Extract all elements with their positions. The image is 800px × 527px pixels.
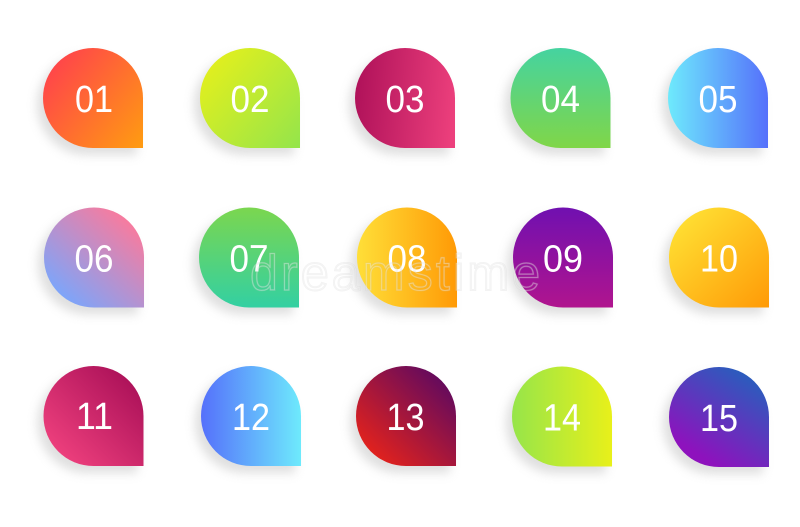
badge 11: [38, 366, 144, 473]
badge 08: [351, 208, 457, 314]
badge 10: [663, 208, 769, 314]
badge 05: [662, 48, 768, 155]
badge 12: [195, 366, 301, 473]
watermark: dreamstime: [250, 245, 540, 301]
badge 05: 05: [698, 79, 738, 121]
badge 02: 02: [230, 79, 270, 121]
badge 10: 10: [700, 238, 738, 280]
badge 15: [663, 367, 769, 474]
badge 07: [193, 208, 299, 314]
watermark: dreamstime: [250, 245, 540, 301]
badge 15: 15: [700, 398, 738, 440]
badge 13: 13: [386, 397, 424, 439]
badge 01: [37, 48, 143, 155]
badge 09: [507, 208, 613, 314]
badge 03: 03: [386, 79, 424, 121]
badge 04: [504, 48, 610, 155]
badge 13: [350, 366, 456, 473]
badge 09: 09: [543, 238, 583, 280]
badge 08: 08: [388, 238, 426, 280]
badge 03: [349, 48, 455, 155]
badge 04: 04: [541, 79, 580, 121]
badge 14: [506, 366, 612, 474]
badge 12: 12: [232, 397, 270, 439]
badge 06: 06: [74, 238, 114, 280]
badge 06: [38, 208, 144, 314]
badge 07: 07: [230, 238, 268, 280]
badge 01: 01: [75, 79, 113, 121]
badge 02: [194, 48, 300, 155]
badge 11: 11: [76, 396, 113, 438]
badge 14: 14: [543, 398, 581, 440]
